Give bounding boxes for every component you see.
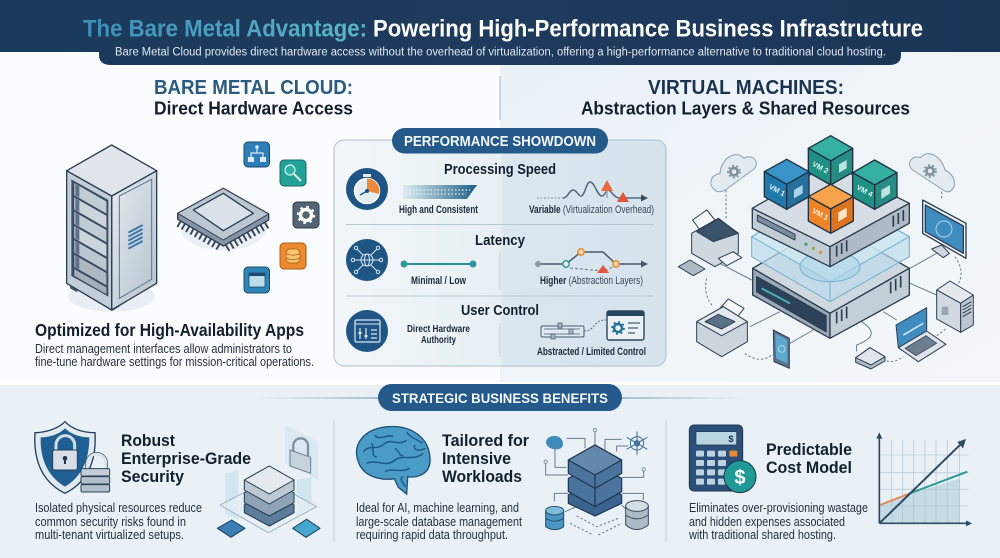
- badge: strategic business benefits: [378, 384, 622, 411]
- chart: variable speed line: [537, 180, 648, 202]
- benefit: security: multi-tenant virtualized setups.: [35, 528, 184, 542]
- benefit: workloads: large-scale database management: [356, 515, 522, 529]
- heading: bare metal cloud: [154, 77, 353, 118]
- illustration: virtualized infrastructure: [678, 136, 973, 369]
- row: user control: Abstracted / Limited Control: [537, 346, 646, 358]
- row: processing speed: [346, 162, 654, 216]
- text: high availability apps: fine-tune hardware settings for mission-critical operations.: [35, 355, 314, 369]
- benefit: cost model: Predictable: [766, 441, 852, 459]
- tower: [937, 281, 973, 332]
- cube: VM 1 blue: [764, 159, 809, 209]
- badge: performance showdown: [392, 128, 608, 154]
- benefit: cost model: [688, 425, 972, 542]
- benefit: cost model: Cost Model: [766, 459, 852, 477]
- cube: VM 4: [853, 160, 897, 209]
- benefit: workloads: [356, 427, 648, 542]
- benefit: security: common security risks found in: [35, 515, 186, 529]
- bottom server: [753, 223, 909, 338]
- heading: virtual machines: [581, 77, 910, 118]
- benefit: cost model: with traditional shared hosting.: [688, 528, 836, 542]
- text: high availability apps: Direct management interfaces allow administrators to: [35, 342, 292, 356]
- text: high availability apps: Optimized for High-Availability Apps: [35, 320, 304, 340]
- top server: [752, 163, 909, 267]
- text: high availability apps: [35, 320, 314, 369]
- panel: performance showdown: [334, 128, 666, 366]
- icon: gear: [293, 202, 319, 228]
- title: The Bare Metal Advantage:: [83, 16, 367, 42]
- illustration: cpu chip: [178, 188, 269, 250]
- benefit: security: Isolated physical resources reduce: [35, 501, 202, 515]
- icon: brain: [357, 427, 430, 494]
- benefit: workloads: Workloads: [442, 468, 522, 486]
- router: [856, 348, 885, 369]
- chart: consistent speed bar: [403, 185, 477, 199]
- background: upper right: [500, 50, 1000, 382]
- monitor: [923, 200, 966, 258]
- row: processing speed: Variable (Virtualization Overhead): [529, 204, 654, 216]
- icon: network globe: [346, 239, 388, 281]
- icon: abstracted controls: [541, 311, 644, 340]
- icon: calculator: $: [734, 467, 746, 489]
- row: processing speed: Processing Speed: [444, 162, 556, 178]
- subtitle: Bare Metal Cloud provides direct hardware access without the overhead of virtualization, offering a high-performance alternative to traditional cloud hosting.: [115, 46, 886, 58]
- cloud right: [909, 154, 954, 192]
- heading: virtual machines: Abstraction Layers & Shared Resources: [581, 98, 910, 118]
- row: user control: Authority: [421, 334, 456, 346]
- benefit: workloads: Ideal for AI, machine learning, and: [356, 501, 519, 515]
- benefit: security: [35, 422, 320, 542]
- benefit: workloads: requiring rapid data throughput.: [356, 528, 508, 542]
- benefit: cost model: and hidden expenses associated: [689, 515, 845, 529]
- icon: shield and locks: [35, 422, 110, 493]
- background: benefits band: [0, 385, 1000, 558]
- illustration: server rack: [67, 145, 157, 312]
- row: processing speed: High and Consistent: [399, 204, 478, 216]
- chart: higher latency path: [535, 249, 648, 273]
- benefit: security: Security: [121, 468, 185, 486]
- cube: VM 1 orange: [808, 184, 853, 233]
- cube: VM 2: VM 2: [811, 159, 830, 175]
- benefit: workloads: Tailored for: [442, 432, 530, 450]
- row: user control: User Control: [461, 303, 539, 319]
- illustration: isolated server: [217, 425, 320, 537]
- icon: terminal window: [244, 267, 270, 293]
- benefit: security: Robust: [121, 432, 175, 450]
- title continuation: Powering High-Performance Business Infrastructure: [373, 16, 923, 42]
- row: latency: Higher (Abstraction Layers): [540, 275, 643, 287]
- icon: calculator: [689, 425, 756, 493]
- benefit: security: Enterprise-Grade: [121, 450, 251, 468]
- row: latency: Minimal / Low: [411, 275, 466, 287]
- cube: VM 2: [808, 136, 853, 185]
- laptop: [896, 308, 946, 362]
- glass layer: [752, 192, 909, 302]
- icon: network hierarchy: [244, 142, 270, 167]
- icon: calculator: $: [728, 434, 734, 444]
- row: user control: Direct Hardware: [407, 323, 470, 335]
- icon: control interface: [346, 310, 388, 352]
- benefit: cost model: Eliminates over-provisioning wastage: [689, 501, 868, 515]
- badge: strategic business benefits: STRATEGIC BUSINESS BENEFITS: [392, 390, 608, 406]
- chart: minimal latency line: [400, 260, 476, 268]
- icon: database: [280, 243, 306, 269]
- benefit: workloads: Intensive: [442, 450, 511, 468]
- cube: VM 4: VM 4: [855, 183, 875, 199]
- illustration: server and data stack: [544, 428, 648, 535]
- cloud left: [711, 155, 756, 192]
- divider lines beside badge: [257, 397, 380, 399]
- connections: [706, 190, 961, 361]
- background: upper left: [0, 50, 500, 382]
- row: latency: [346, 233, 648, 287]
- heading: bare metal cloud: BARE METAL CLOUD:: [154, 77, 353, 99]
- row: latency: Latency: [475, 233, 525, 249]
- cube: VM 1 orange: VM 1: [811, 206, 830, 222]
- chart: cost over time: [876, 432, 972, 526]
- row: user control: [346, 303, 646, 358]
- header banner: [0, 0, 1000, 65]
- icon: magnifier: [280, 160, 306, 186]
- printer lower: [697, 299, 747, 357]
- heading: bare metal cloud: Direct Hardware Access: [154, 98, 353, 118]
- printer upper: [678, 210, 742, 276]
- phone: [773, 330, 789, 368]
- cube: VM 1 blue: VM 1: [767, 182, 787, 198]
- badge: performance showdown: PERFORMANCE SHOWDOWN: [404, 134, 596, 150]
- icon: stopwatch: [346, 168, 388, 210]
- heading: virtual machines: VIRTUAL MACHINES:: [648, 77, 844, 99]
